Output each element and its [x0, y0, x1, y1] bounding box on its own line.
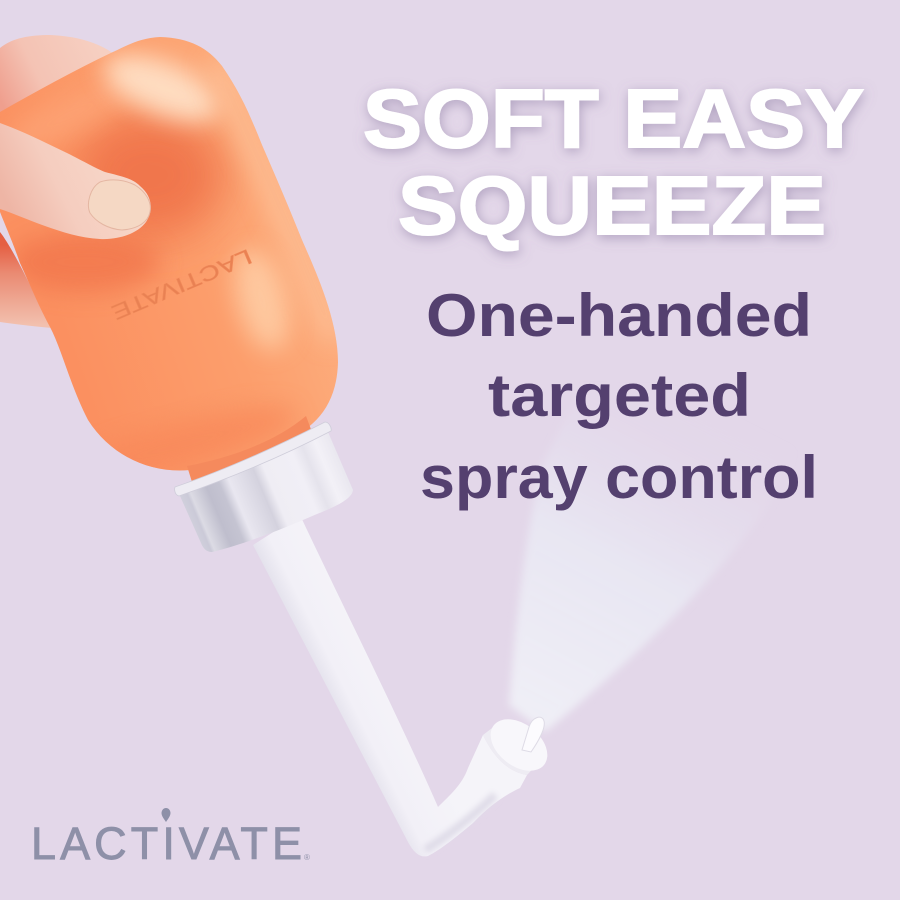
- hand: thumb: [0, 123, 151, 239]
- subheading line 3: spray control: [420, 444, 818, 511]
- hand: top finger: [0, 35, 114, 118]
- embossed brand on bottle: LACTIVATE: [108, 244, 255, 324]
- hand: lower fingers behind bottle: [0, 232, 52, 328]
- product: peri bottle: [0, 30, 557, 856]
- headline line 2: SQUEEZE: [398, 159, 826, 252]
- registered mark: ®: [304, 853, 310, 862]
- bottle highlight: right: [225, 244, 299, 356]
- tube shading: [425, 795, 495, 850]
- headline line 1: SOFT EASY: [363, 72, 864, 165]
- subheading: [420, 282, 818, 511]
- logo wordmark: LACTIVATE: [31, 818, 302, 869]
- logo drop: [162, 808, 170, 822]
- tube and nozzle neck: [253, 515, 527, 856]
- logo: [31, 808, 310, 869]
- nozzle head: [481, 709, 557, 781]
- bottle body: [0, 30, 345, 497]
- screw cap: [175, 422, 353, 552]
- bottle neck: [187, 416, 312, 482]
- subheading line 2: targeted: [488, 362, 751, 429]
- bottle highlight: top: [95, 41, 229, 135]
- subheading line 1: One-handed: [426, 282, 812, 349]
- bottle shading: squeezed dent: [75, 113, 225, 237]
- cap rim: [175, 422, 331, 496]
- spray cone: [509, 390, 810, 732]
- bottle highlight: right shoulder: [215, 60, 335, 340]
- thumbnail: [88, 180, 150, 230]
- headline: [363, 72, 864, 252]
